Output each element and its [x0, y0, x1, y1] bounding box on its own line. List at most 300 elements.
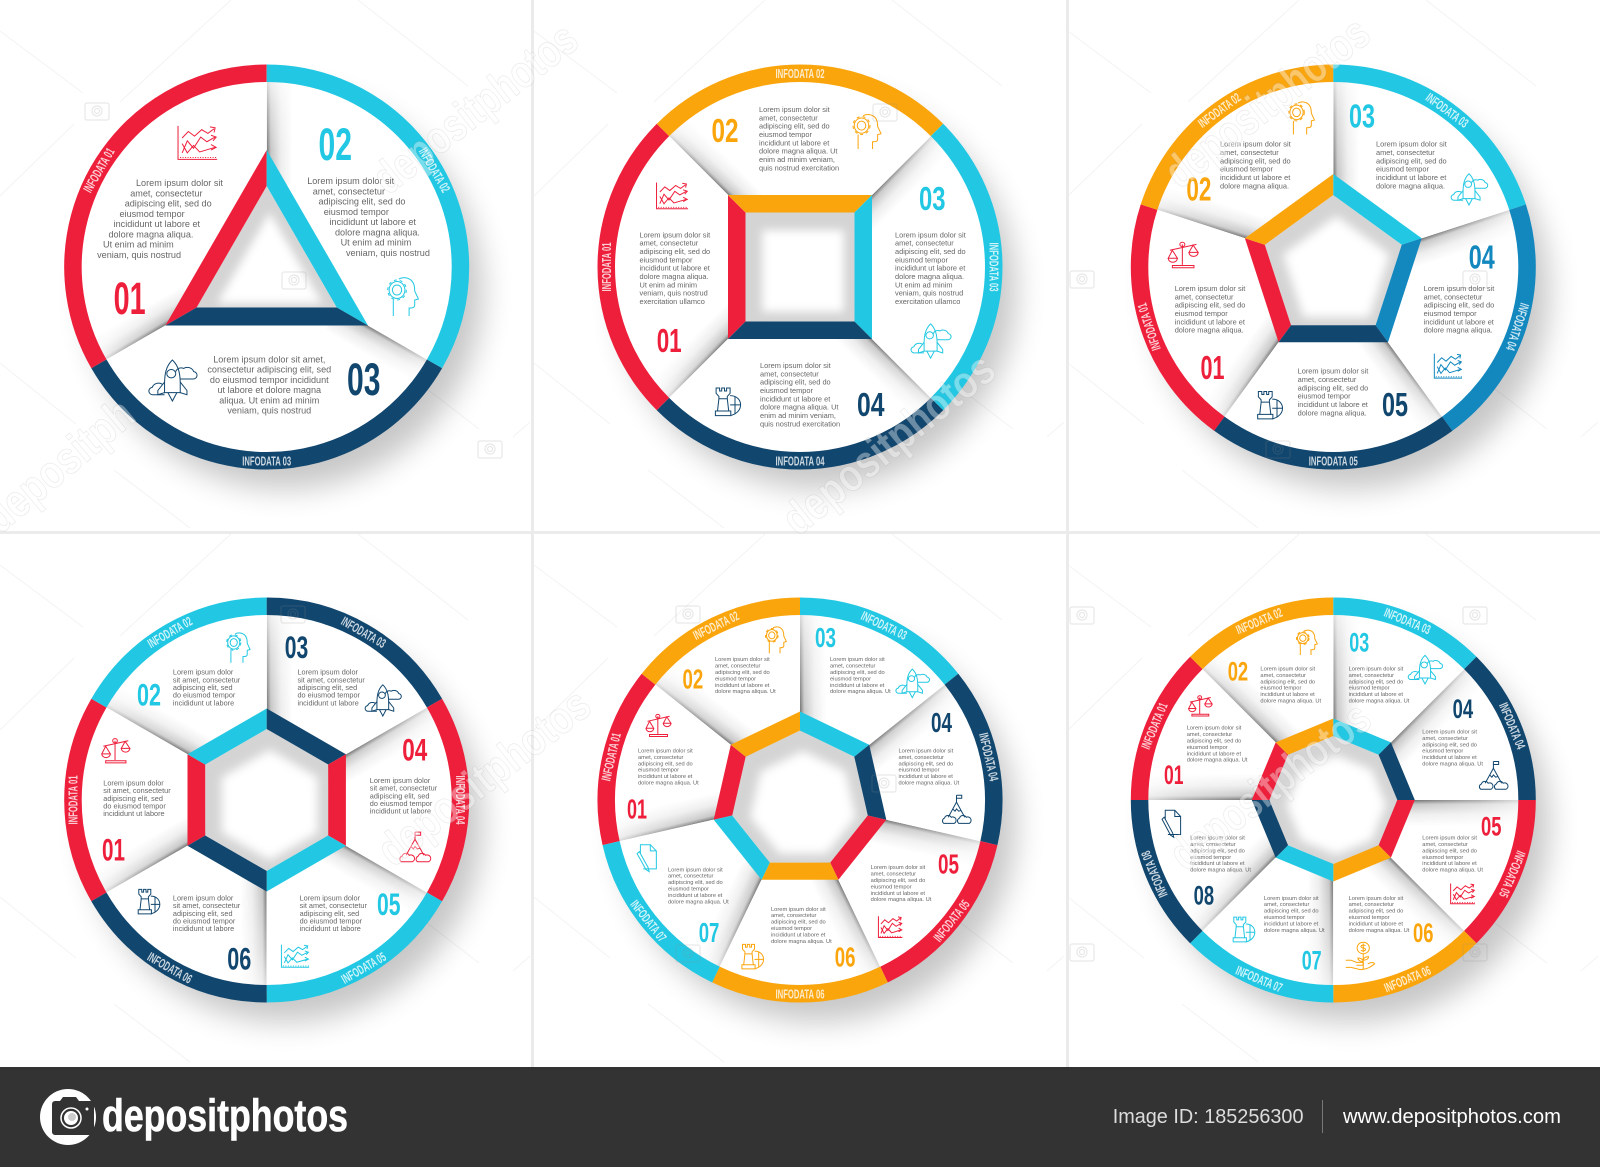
wheel: octagon: INFODATA 04: [1496, 700, 1529, 752]
text block 04: adipiscing elit, sed do: [898, 761, 953, 767]
text block 03: Lorem ipsum dolor sit: [1349, 666, 1404, 672]
wheel: octagon: INFODATA 02: [1234, 605, 1285, 637]
wheel: triangle: [64, 64, 496, 503]
text block 02: dolore magna aliqua. Ut: [1260, 698, 1322, 704]
text block 06: eiusmod tempor: [771, 926, 812, 932]
wheel: octagon: INFODATA 01: [1138, 700, 1171, 751]
text block 05: adipiscing elit, sed: [300, 909, 359, 918]
text block 04: do eiusmod tempor: [370, 799, 433, 808]
text block 07: eiusmod tempor: [668, 886, 709, 892]
text block 03: consectetur adipiscing elit, sed: [207, 365, 331, 375]
text block 07: dolore magna aliqua. Ut: [668, 899, 729, 905]
wheel: hexagon: [64, 598, 496, 1036]
number 02: 02: [137, 677, 161, 713]
text block 03: Lorem ipsum dolor: [298, 668, 358, 677]
text block 01: dolore magna aliqua.: [1175, 326, 1244, 335]
text block 05: sit amet, consectetur: [300, 901, 367, 910]
text block 01: incididunt ut labore et: [114, 219, 201, 229]
text block 07: dolore magna aliqua. Ut: [1264, 928, 1325, 934]
text block 02: eiusmod tempor: [715, 676, 756, 682]
text block 02: incididunt ut labore et: [715, 683, 770, 689]
text block 01: dolore magna aliqua. Ut: [638, 780, 699, 786]
wheel: heptagon: INFODATA 03: [859, 608, 909, 643]
text block 01: incididunt ut labore: [103, 809, 165, 818]
text block 01: adipiscing elit, sed: [103, 794, 163, 803]
text block 04: adipiscing elit, sed do: [1422, 742, 1477, 748]
text block 01: do eiusmod tempor: [103, 802, 166, 811]
text block 03: amet, consectetur: [830, 664, 876, 670]
text block 01: sit amet, consectetur: [103, 786, 171, 795]
text block 05: do eiusmod tempor: [300, 917, 363, 926]
text block 07: Lorem ipsum dolor sit: [668, 867, 723, 873]
text block 03: do eiusmod tempor incididunt: [210, 375, 329, 385]
text block 03: eiusmod tempor: [830, 676, 871, 682]
text block 03: sit amet, consectetur: [298, 675, 365, 684]
number 02: 02: [318, 119, 352, 170]
text block 03: incididunt ut labore et: [1376, 173, 1446, 182]
text block 03: adipiscing elit, sed: [298, 683, 357, 692]
wheel: heptagon: INFODATA 05: [930, 897, 973, 945]
text block 02: amet, consectetur: [715, 664, 761, 670]
text block 07: incididunt ut labore et: [668, 893, 723, 899]
footer bar: [0, 1067, 1600, 1167]
wheel: pentagon: INFODATA 05: [1309, 453, 1358, 468]
text block 01: adipiscing elit, sed do: [640, 247, 710, 256]
text block 04: dolore magna aliqua. Ut: [898, 780, 960, 786]
text block 06: dolore magna aliqua. Ut: [771, 939, 832, 945]
text block 02: Lorem ipsum dolor sit: [715, 657, 770, 663]
text block 01: eiusmod tempor: [120, 209, 185, 219]
number 03: 03: [347, 354, 380, 405]
text block 08: eiusmod tempor: [1190, 855, 1231, 861]
number 04: 04: [931, 707, 952, 738]
panel: seven-segment circle: [597, 598, 1030, 1036]
watermark overlay: depositphotos: [1159, 691, 1380, 880]
text block 03: amet, consectetur: [895, 239, 954, 248]
text block 04: adipiscing elit, sed do: [1424, 301, 1494, 310]
watermark overlay: depositphotos: [367, 678, 600, 876]
text block 02: amet, consectetur: [1260, 673, 1306, 679]
text block 01: Ut enim ad minim: [103, 240, 174, 250]
text block 05: incididunt ut labore et: [871, 891, 925, 897]
text block 01: Lorem ipsum dolor sit: [640, 230, 710, 239]
text block 04: eiusmod tempor: [760, 386, 814, 395]
text block 05: dolore magna aliqua. Ut: [871, 897, 932, 903]
text block 03: adipiscing elit, sed do: [830, 670, 885, 676]
watermark overlay: [0, 6, 1487, 962]
logo wordmark: depositphotos: [102, 1090, 348, 1141]
text block 04: Lorem ipsum dolor sit: [898, 748, 954, 754]
wheel: pentagon: INFODATA 03: [1423, 90, 1471, 131]
icon: balance scale: [646, 714, 671, 736]
text block 01: dolore magna aliqua. Ut: [1187, 758, 1248, 764]
text block 02: dolore magna aliqua. Ut: [715, 689, 776, 695]
icon: rook and shield: [1233, 917, 1255, 942]
number 03: 03: [285, 629, 308, 665]
number 05: 05: [1382, 387, 1408, 424]
text block 06: Lorem ipsum dolor sit: [1349, 896, 1404, 902]
text block 05: Lorem ipsum dolor sit: [1298, 367, 1368, 376]
text block 06: do eiusmod tempor: [173, 917, 236, 926]
text block 02: Lorem ipsum dolor: [173, 668, 234, 677]
text block 07: adipiscing elit, sed do: [668, 880, 723, 886]
number 03: 03: [919, 180, 946, 217]
text block 07: incididunt ut labore et: [1264, 921, 1319, 927]
wheel: square: INFODATA 01: [599, 242, 614, 292]
text block 06: adipiscing elit, sed do: [1349, 909, 1403, 915]
text block 01: dolore magna aliqua.: [108, 229, 193, 239]
text block 05: dolore magna aliqua. Ut: [1422, 868, 1483, 874]
text block 01: amet, consectetur: [130, 188, 202, 198]
text block 01: amet, consectetur: [1175, 292, 1234, 301]
text block 05: Lorem ipsum dolor: [300, 894, 361, 902]
panel: six-segment circle: [64, 598, 496, 1036]
icon: rook and shield: [715, 388, 741, 416]
text block 02: Ut enim ad minim: [341, 238, 411, 248]
icon: head with gear: [388, 278, 418, 316]
wheel: octagon: INFODATA 07: [1234, 963, 1285, 995]
text block 06: incididunt ut labore: [173, 924, 234, 933]
text block 01: adipiscing elit, sed do: [125, 198, 212, 208]
wheel: octagon: INFODATA 06: [1382, 963, 1433, 995]
wheel: pentagon: INFODATA 02: [1195, 90, 1244, 131]
text block 08: Lorem ipsum dolor sit: [1190, 836, 1245, 842]
icon: rook and shield: [742, 944, 764, 969]
text block 03: dolore magna aliqua. Ut: [1349, 698, 1410, 704]
number 02: 02: [1228, 656, 1248, 686]
wheel: octagon: INFODATA 03: [1382, 605, 1433, 637]
number 02: 02: [1186, 171, 1211, 208]
text block 05: amet, consectetur: [871, 872, 916, 878]
icon: balance scale: [1189, 696, 1212, 716]
text block 05: amet, consectetur: [1298, 375, 1357, 384]
text block 01: veniam, quis nostrud: [97, 250, 181, 260]
text block 01: Lorem ipsum dolor sit: [1175, 284, 1245, 293]
icon: document and pen: [1162, 810, 1181, 837]
icon: head with gear: [853, 115, 881, 149]
text block 03: incididunt ut labore: [298, 698, 359, 707]
icon: rocket and clouds: [365, 685, 401, 716]
number 01: 01: [102, 832, 125, 868]
text block 04: incididunt ut labore et: [898, 774, 953, 780]
panel: five-segment circle: [1130, 64, 1564, 503]
text block 02: eiusmod tempor: [759, 130, 813, 139]
wheel: hexagon: INFODATA 02: [145, 613, 195, 651]
wheel: hexagon: INFODATA 05: [339, 949, 389, 987]
text block 06: amet, consectetur: [1349, 902, 1394, 908]
image id: Image ID: 185256300: [1113, 1106, 1304, 1128]
wheel: hexagon: INFODATA 04: [453, 776, 468, 825]
text block 06: adipiscing elit, sed do: [771, 920, 826, 926]
text block 02: veniam, quis nostrud: [346, 248, 430, 258]
text block 02: Lorem ipsum dolor sit: [1260, 666, 1315, 672]
text block 03: incididunt ut labore et: [895, 264, 965, 273]
text block 04: dolore magna aliqua.: [1424, 326, 1493, 335]
text block 02: sit amet, consectetur: [173, 675, 241, 684]
icon: rook and shield: [138, 889, 160, 914]
text block 03: Lorem ipsum dolor sit: [895, 230, 966, 239]
text block 06: sit amet, consectetur: [173, 901, 241, 910]
website url: www.depositphotos.com: [1342, 1106, 1561, 1128]
text block 01: incididunt ut labore et: [638, 774, 693, 780]
text block 05: adipiscing elit, sed do: [871, 878, 925, 884]
text block 06: eiusmod tempor: [1349, 915, 1390, 921]
wheel: heptagon: INFODATA 06: [776, 986, 824, 1001]
number 05: 05: [938, 849, 959, 880]
icon: mountain with flag: [400, 832, 431, 862]
text block 02: incididunt ut labore: [173, 698, 234, 707]
number 08: 08: [1194, 881, 1214, 911]
wheel: triangle: INFODATA 01: [80, 145, 118, 195]
text block 02: eiusmod tempor: [324, 207, 389, 217]
text block 03: Ut enim ad minim: [895, 280, 952, 289]
text block 03: aliqua. Ut enim ad minim: [219, 395, 319, 405]
text block 03: veniam, quis nostrud: [227, 406, 311, 416]
number 01: 01: [627, 794, 647, 825]
icon: growth chart: [178, 126, 217, 159]
text block 01: eiusmod tempor: [638, 768, 679, 774]
text block 02: amet, consectetur: [313, 186, 385, 196]
text block 04: adipiscing elit, sed: [370, 791, 429, 800]
icon: mountain with flag: [1479, 761, 1508, 789]
icon: rocket and clouds: [1408, 655, 1443, 684]
text block 02: amet, consectetur: [1220, 148, 1279, 157]
number 07: 07: [1302, 945, 1322, 975]
icon: growth chart: [1451, 884, 1475, 904]
text block 04: Lorem ipsum dolor sit: [1422, 730, 1477, 736]
icon: document and pen: [637, 845, 656, 872]
text block 03: eiusmod tempor: [1376, 165, 1430, 174]
icon: growth chart: [281, 945, 309, 967]
wheel: heptagon: [597, 598, 1030, 1036]
text block 03: incididunt ut labore et: [830, 683, 885, 689]
wheel: hexagon: INFODATA 06: [145, 949, 195, 987]
text block 08: incididunt ut labore et: [1190, 861, 1245, 867]
text block 01: amet, consectetur: [640, 239, 699, 248]
wheel: octagon: [1130, 598, 1564, 1036]
text block 07: amet, consectetur: [668, 874, 714, 880]
text block 06: incididunt ut labore et: [771, 932, 826, 938]
number 03: 03: [815, 622, 836, 653]
wheel: pentagon: [1130, 64, 1564, 503]
icon: head with gear: [1289, 102, 1314, 134]
text block 01: incididunt ut labore et: [1175, 317, 1245, 326]
text block 04: amet, consectetur: [1422, 736, 1468, 742]
number 06: 06: [227, 941, 251, 977]
text block 02: adipiscing elit, sed do: [715, 670, 770, 676]
text block 02: eiusmod tempor: [1220, 165, 1274, 174]
text block 04: sit amet, consectetur: [370, 784, 438, 793]
number 01: 01: [1164, 760, 1184, 790]
icon: head with gear: [227, 633, 250, 663]
icon: rocket and clouds: [911, 324, 951, 358]
panel: three-segment circle: [64, 64, 496, 503]
text block 05: adipiscing elit, sed do: [1422, 848, 1477, 854]
text block 02: incididunt ut labore et: [759, 138, 829, 147]
text block 08: amet, consectetur: [1190, 842, 1236, 848]
text block 02: dolore magna aliqua.: [1220, 181, 1289, 190]
number 06: 06: [1413, 918, 1434, 948]
number 01: 01: [114, 273, 146, 324]
wheel: heptagon: INFODATA 01: [598, 731, 624, 782]
text block 01: Lorem ipsum dolor sit: [1187, 726, 1242, 732]
text block 01: Ut enim ad minim: [640, 280, 697, 289]
text block 04: eiusmod tempor: [1422, 749, 1463, 755]
text block 07: amet, consectetur: [1264, 902, 1309, 908]
text block 04: dolore magna aliqua. Ut: [760, 403, 838, 412]
number 03: 03: [1349, 98, 1375, 135]
text block 04: amet, consectetur: [1424, 292, 1483, 301]
text block 02: enim ad minim veniam,: [759, 155, 835, 164]
wheel: triangle: INFODATA 02: [416, 145, 453, 195]
text block 05: incididunt ut labore: [300, 924, 361, 933]
text block 02: incididunt ut labore et: [330, 217, 416, 227]
text block 04: enim ad minim veniam,: [760, 411, 836, 420]
text block 02: eiusmod tempor: [1260, 686, 1301, 692]
text block 03: dolore magna aliqua.: [1376, 181, 1445, 190]
icon: head with gear: [766, 627, 786, 653]
text block 05: dolore magna aliqua.: [1298, 408, 1367, 417]
text block 05: adipiscing elit, sed do: [1298, 383, 1368, 392]
text block 02: adipiscing elit, sed do: [1260, 679, 1315, 685]
text block 04: Lorem ipsum dolor: [370, 776, 431, 785]
text block 02: Lorem ipsum dolor sit: [1220, 140, 1291, 149]
icon: head with gear: [1297, 630, 1317, 655]
number 04: 04: [1453, 694, 1473, 724]
text block 03: veniam, quis nostrud: [895, 289, 963, 298]
text block 03: Lorem ipsum dolor sit: [1376, 140, 1447, 149]
text block 04: quis nostrud exercitation: [760, 419, 840, 428]
text block 03: exercitation ullamco: [895, 297, 960, 306]
text block 06: amet, consectetur: [771, 913, 817, 919]
text block 05: amet, consectetur: [1422, 842, 1468, 848]
icon: hand with money plant: [1346, 942, 1375, 970]
text block 01: eiusmod tempor: [1187, 745, 1228, 751]
text block 06: dolore magna aliqua. Ut: [1349, 928, 1410, 934]
number 05: 05: [1481, 811, 1502, 841]
text block 04: incididunt ut labore: [370, 807, 431, 816]
text block 01: incididunt ut labore et: [1187, 751, 1241, 757]
text block 04: incididunt ut labore et: [1422, 755, 1477, 761]
text block 07: adipiscing elit, sed do: [1264, 909, 1319, 915]
wheel: square: INFODATA 04: [776, 453, 825, 468]
text block 01: Lorem ipsum dolor: [103, 778, 164, 788]
text block 02: Lorem ipsum dolor sit: [759, 105, 830, 114]
text block 02: amet, consectetur: [759, 113, 818, 122]
number 01: 01: [1200, 350, 1224, 387]
text block 03: Lorem ipsum dolor sit amet,: [213, 354, 325, 364]
wheel: octagon: INFODATA 08: [1138, 849, 1171, 900]
text block 03: adipiscing elit, sed do: [1376, 156, 1447, 165]
text block 04: dolore magna aliqua. Ut: [1422, 762, 1483, 768]
panel: four-segment circle: [598, 64, 1030, 503]
text block 03: amet, consectetur: [1349, 673, 1394, 679]
text block 03: dolore magna aliqua. Ut: [830, 689, 891, 695]
wheel: hexagon: INFODATA 01: [65, 776, 80, 824]
text block 02: dolore magna aliqua.: [335, 227, 420, 237]
text block 02: incididunt ut labore et: [1260, 692, 1315, 698]
text block 04: incididunt ut labore et: [1424, 317, 1494, 326]
text block 02: dolore magna aliqua. Ut: [759, 147, 837, 156]
text block 01: eiusmod tempor: [640, 255, 693, 264]
wheel: heptagon: INFODATA 02: [691, 608, 741, 643]
text block 01: exercitation ullamco: [640, 297, 705, 306]
text block 01: dolore magna aliqua.: [640, 272, 709, 281]
text block 05: incididunt ut labore et: [1298, 400, 1368, 409]
wheel: heptagon: INFODATA 07: [627, 897, 670, 945]
icon: growth chart: [657, 183, 688, 209]
icon: balance scale: [1168, 242, 1198, 268]
text block 01: eiusmod tempor: [1175, 309, 1228, 318]
watermark overlay: depositphotos: [772, 342, 1005, 545]
text block 01: incididunt ut labore et: [640, 264, 710, 273]
icon: growth chart: [878, 916, 902, 938]
number 03: 03: [1349, 628, 1369, 658]
number 05: 05: [377, 886, 400, 922]
text block 02: do eiusmod tempor: [173, 691, 236, 700]
number 01: 01: [657, 322, 682, 359]
text block 05: incididunt ut labore et: [1422, 861, 1477, 867]
wheel: triangle: INFODATA 03: [242, 453, 291, 468]
text block 07: Lorem ipsum dolor sit: [1264, 896, 1319, 902]
text block 03: ut labore et dolore magna: [217, 385, 322, 395]
wheel: heptagon: INFODATA 04: [976, 731, 1002, 783]
wheel: square: INFODATA 02: [776, 66, 824, 81]
text block 05: eiusmod tempor: [871, 884, 912, 890]
wheel: octagon: INFODATA 05: [1496, 849, 1529, 900]
text block 03: incididunt ut labore et: [1349, 692, 1403, 698]
text block 08: adipiscing elit, sed do: [1190, 848, 1245, 854]
text block 04: Lorem ipsum dolor sit: [760, 361, 831, 370]
text block 05: eiusmod tempor: [1298, 392, 1351, 401]
logo: camera in circle: [40, 1089, 96, 1145]
icon: mountain with flag: [943, 795, 971, 823]
text block 01: amet, consectetur: [638, 755, 684, 761]
text block 03: dolore magna aliqua.: [895, 272, 964, 281]
text block 05: Lorem ipsum dolor sit: [871, 865, 926, 871]
text block 03: eiusmod tempor: [895, 255, 949, 264]
text block 04: Lorem ipsum dolor sit: [1424, 284, 1494, 293]
icon: rocket and clouds: [896, 669, 929, 698]
text block 01: amet, consectetur: [1187, 732, 1232, 738]
number 04: 04: [857, 386, 885, 423]
text block 06: adipiscing elit, sed: [173, 909, 233, 918]
text block 03: amet, consectetur: [1376, 148, 1435, 157]
text block 04: amet, consectetur: [898, 755, 944, 761]
text block 01: adipiscing elit, sed do: [638, 761, 693, 767]
text block 01: Lorem ipsum dolor sit: [638, 748, 693, 754]
wheel: hexagon: INFODATA 03: [339, 613, 389, 651]
text block 02: adipiscing elit, sed do: [1220, 156, 1291, 165]
text block 02: adipiscing elit, sed do: [759, 122, 830, 131]
text block 06: incididunt ut labore et: [1349, 921, 1403, 927]
text block 02: adipiscing elit, sed: [173, 683, 233, 692]
text block 04: adipiscing elit, sed do: [760, 378, 831, 387]
text block 02: adipiscing elit, sed do: [318, 197, 405, 207]
number 02: 02: [682, 663, 703, 694]
wheel: square: [598, 64, 1030, 503]
text block 01: Lorem ipsum dolor sit: [136, 178, 223, 188]
text block 03: adipiscing elit, sed do: [1349, 679, 1403, 685]
text block 03: eiusmod tempor: [1349, 686, 1390, 692]
number 04: 04: [1469, 240, 1495, 277]
number 06: 06: [835, 942, 856, 973]
text block 02: Lorem ipsum dolor sit: [307, 176, 395, 186]
text block 04: eiusmod tempor: [898, 768, 940, 774]
text block 02: quis nostrud exercitation: [759, 163, 839, 172]
icon: growth chart: [1434, 354, 1462, 378]
wheel: square: INFODATA 03: [986, 242, 1001, 292]
